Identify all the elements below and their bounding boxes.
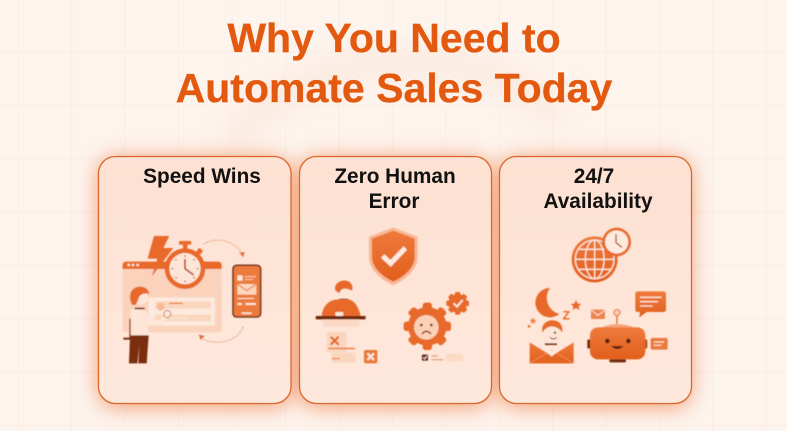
icon: chat bubble small [651,338,668,350]
heading: 24/7 availability: Availability [543,190,653,213]
panel glow [98,158,691,407]
browser window [123,262,222,332]
icon: smartphone [233,265,261,317]
icon: x box [364,350,377,363]
icon: stopwatch [165,241,205,289]
heading: speed wins: Speed Wins [143,165,261,188]
icon: moon [535,288,559,317]
arrowheads [199,252,245,340]
profile card [148,297,215,326]
heading: zero human error: Error [369,190,419,213]
heading: zero human error [334,165,456,213]
icon: robot [587,310,647,362]
illustration: zero human error [316,227,469,363]
illustration: speed wins [123,236,261,363]
icon: globe [572,236,618,282]
icon: mail [591,310,605,319]
icon: lightning bolt [148,236,173,277]
sleep z and stars: Z [563,308,570,322]
title: Why You Need to [227,15,561,61]
arrow: to phone [202,240,243,342]
panel: 24/7 availability [500,156,692,404]
title [176,15,613,111]
title: Automate Sales Today [176,65,613,111]
panel: speed wins [98,156,291,404]
icon: sad gear [404,303,451,350]
person [123,287,171,363]
heading: 24/7 availability: 24/7 [574,165,614,188]
person in envelope [530,320,574,363]
checklist [422,354,464,361]
error papers [327,332,356,363]
person at desk [316,280,366,327]
illustration: availability [528,228,668,363]
icon: shield [369,227,418,285]
icon: chat bubble large [635,291,666,317]
icon: small check gear [446,292,469,315]
icon: clock [602,228,631,256]
heading: zero human error: Zero Human [334,165,456,188]
panel: zero human error [300,156,492,404]
heading: 24/7 availability [543,165,653,213]
